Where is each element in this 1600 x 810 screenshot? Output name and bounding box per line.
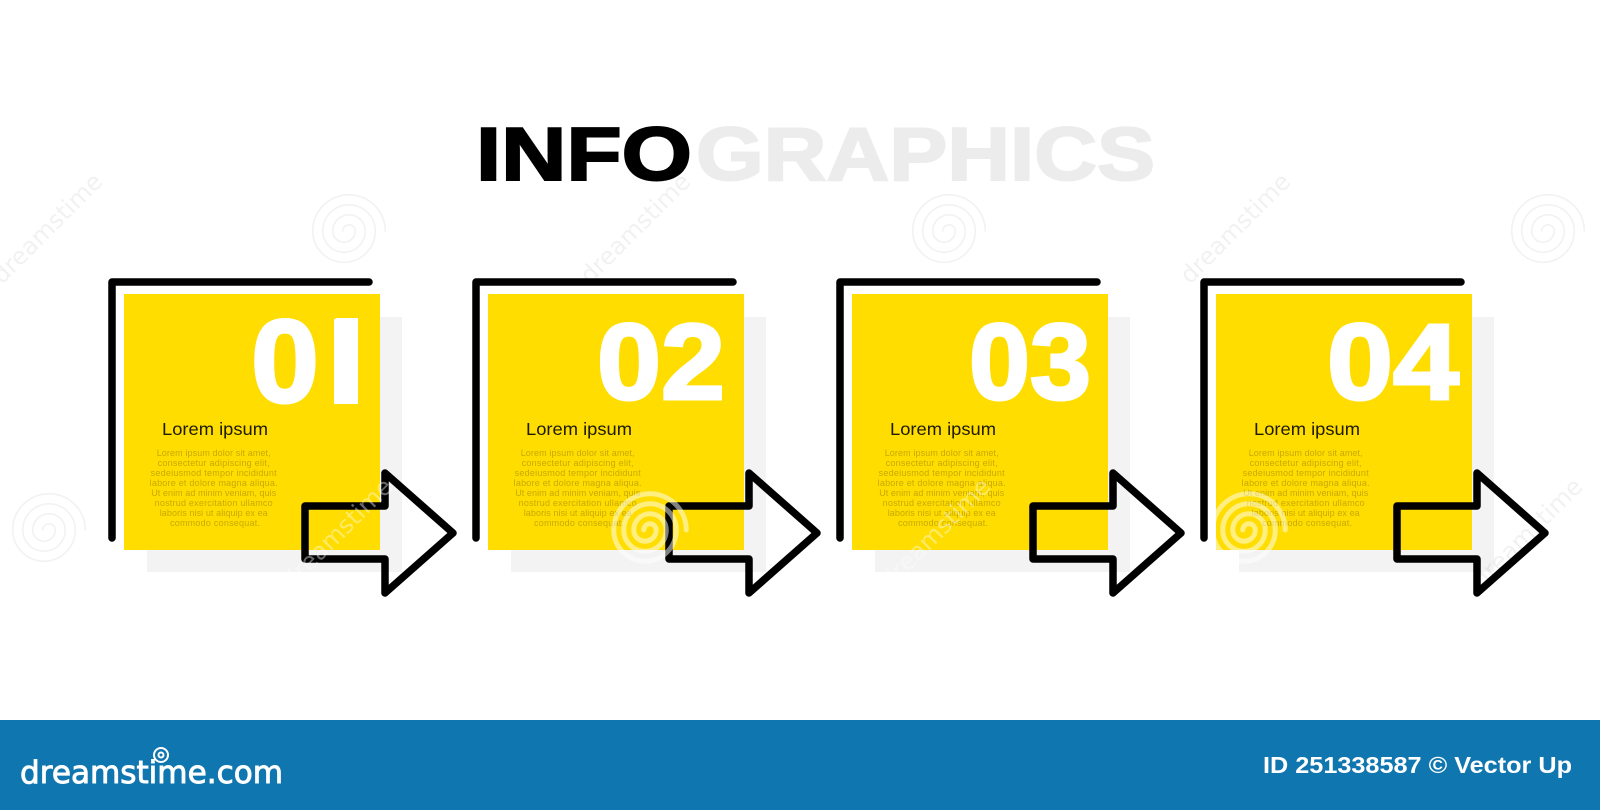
- body text: labore et dolore magna aliqua.: [150, 478, 278, 488]
- yellow card: [124, 294, 380, 550]
- heading: Lorem ipsum: [162, 419, 268, 439]
- body text: nostrud exercitation ullamco: [1247, 498, 1365, 508]
- number 02: 02: [597, 301, 725, 422]
- body text: laboris nisi ut aliquip ex ea: [888, 508, 996, 518]
- corner bracket: [840, 282, 1097, 538]
- watermark diagonal text: dreamstime: [574, 168, 696, 289]
- body text: laboris nisi ut aliquip ex ea: [1252, 508, 1360, 518]
- title word: INFO: INFO: [476, 112, 692, 196]
- corner bracket: [112, 282, 369, 538]
- body text: commodo consequat.: [898, 518, 988, 528]
- body text: consectetur adipiscing elit,: [158, 458, 270, 468]
- watermark diagonal text: dreamstime: [874, 473, 996, 594]
- body text: nostrud exercitation ullamco: [519, 498, 637, 508]
- brand logo text: dreamstime.com: [20, 755, 283, 791]
- arrow: [1033, 473, 1181, 593]
- body text: labore et dolore magna aliqua.: [514, 478, 642, 488]
- image id and credit: ID 251338587 © Vector Up: [1263, 752, 1572, 778]
- number 01: 1: [299, 294, 391, 430]
- body text: sedeiusmod tempor incididunt: [515, 468, 641, 478]
- panel shadow: [511, 317, 766, 572]
- arrow: [669, 473, 817, 593]
- watermark diagonal text: dreamstime: [276, 473, 398, 594]
- body text: consectetur adipiscing elit,: [886, 458, 998, 468]
- body text: Ut enim ad minim veniam, quis: [1243, 488, 1369, 498]
- icon: brand spiral: [154, 748, 168, 762]
- yellow card: [852, 294, 1108, 550]
- body text: laboris nisi ut aliquip ex ea: [524, 508, 632, 518]
- body text: Ut enim ad minim veniam, quis: [879, 488, 1005, 498]
- body text: Lorem ipsum dolor sit amet,: [1249, 448, 1363, 458]
- corner bracket: [476, 282, 733, 538]
- body text: laboris nisi ut aliquip ex ea: [160, 508, 268, 518]
- body text: Lorem ipsum dolor sit amet,: [157, 448, 271, 458]
- body text: Lorem ipsum dolor sit amet,: [521, 448, 635, 458]
- watermark diagonal text: dreamstime: [1174, 168, 1296, 289]
- body text: consectetur adipiscing elit,: [1250, 458, 1362, 468]
- watermark diagonal text: [0, 168, 1588, 594]
- body text: consectetur adipiscing elit,: [522, 458, 634, 468]
- body text: Ut enim ad minim veniam, quis: [515, 488, 641, 498]
- arrow: [305, 473, 453, 593]
- panel: step 04: [1204, 282, 1545, 593]
- body text: commodo consequat.: [1262, 518, 1352, 528]
- yellow card: [1216, 294, 1472, 550]
- watermark spiral row: [13, 195, 1584, 561]
- footer banner: [0, 720, 1600, 810]
- heading: Lorem ipsum: [1254, 419, 1360, 439]
- arrow: [1397, 473, 1545, 593]
- body text: nostrud exercitation ullamco: [155, 498, 273, 508]
- panel: step 02: [476, 282, 817, 593]
- number 04: 04: [1327, 301, 1459, 422]
- number 01: 0: [251, 296, 319, 428]
- body text: labore et dolore magna aliqua.: [1242, 478, 1370, 488]
- heading: Lorem ipsum: [890, 419, 996, 439]
- body text: commodo consequat.: [534, 518, 624, 528]
- watermark diagonal text: dreamstime: [1466, 473, 1588, 594]
- body text: Lorem ipsum dolor sit amet,: [885, 448, 999, 458]
- panel: step 01: [112, 282, 453, 593]
- body text: sedeiusmod tempor incididunt: [879, 468, 1005, 478]
- banner background: [0, 720, 1600, 810]
- corner bracket: [1204, 282, 1461, 538]
- panel: step 03: [840, 282, 1181, 593]
- title word: GRAPHICS: GRAPHICS: [696, 112, 1155, 196]
- number 03: 03: [969, 301, 1091, 422]
- number 01: [254, 318, 358, 404]
- body text: labore et dolore magna aliqua.: [878, 478, 1006, 488]
- body text: nostrud exercitation ullamco: [883, 498, 1001, 508]
- body text: Ut enim ad minim veniam, quis: [151, 488, 277, 498]
- watermark spirals over cards: [614, 494, 1285, 561]
- panel shadow: [147, 317, 402, 572]
- title: [476, 112, 1155, 196]
- body text: commodo consequat.: [170, 518, 260, 528]
- watermarks: [0, 168, 1588, 594]
- panel shadow: [875, 317, 1130, 572]
- body text: sedeiusmod tempor incididunt: [151, 468, 277, 478]
- heading: Lorem ipsum: [526, 419, 632, 439]
- yellow card: [488, 294, 744, 550]
- panel shadow: [1239, 317, 1494, 572]
- body text: sedeiusmod tempor incididunt: [1243, 468, 1369, 478]
